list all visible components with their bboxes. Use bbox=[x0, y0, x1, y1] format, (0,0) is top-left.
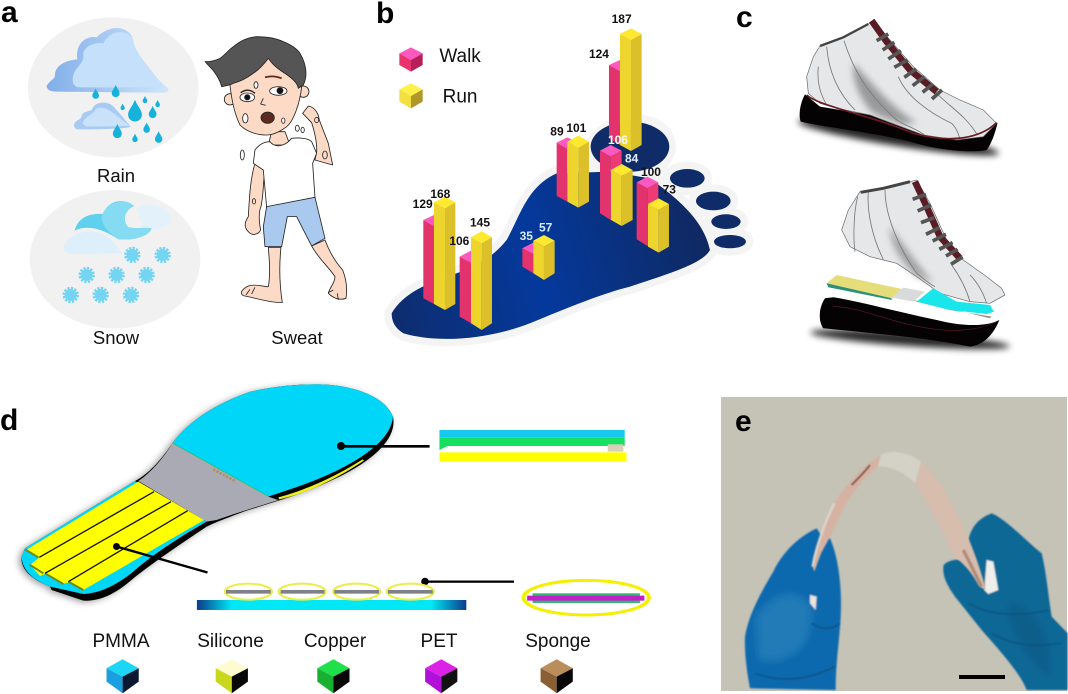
legend: Run: Run bbox=[443, 87, 477, 108]
value labels: 124 bbox=[589, 47, 609, 61]
value labels: 89 bbox=[550, 125, 564, 139]
legend: PET: PET bbox=[421, 631, 458, 652]
illustration: sweating boy bbox=[205, 37, 347, 303]
legend: Run bbox=[399, 83, 477, 108]
bars: forefoot right bbox=[637, 177, 669, 253]
foot with toes bbox=[392, 122, 746, 339]
panel e: photo of bending insole bbox=[721, 397, 1068, 691]
callout line: forefoot section bbox=[113, 543, 514, 585]
value labels: 145 bbox=[470, 216, 490, 230]
legend: Sponge: Sponge bbox=[525, 631, 591, 652]
legend: Silicone bbox=[197, 631, 264, 693]
panel b: foot pressure bar chart bbox=[392, 12, 746, 339]
panel label c: c bbox=[736, 1, 753, 34]
label: Rain: Rain bbox=[97, 165, 135, 186]
legend: Walk: Walk bbox=[439, 46, 481, 67]
cross-section: forefoot bbox=[197, 584, 466, 610]
legend: Silicone: Silicone bbox=[197, 631, 264, 652]
value labels: 35 bbox=[520, 229, 533, 243]
icon: rain bbox=[28, 17, 199, 157]
callout line: heel section bbox=[337, 442, 430, 450]
label: Snow: Snow bbox=[93, 327, 140, 348]
value labels: 84 bbox=[625, 151, 639, 165]
value labels: 106 bbox=[608, 133, 628, 147]
value labels: 129 bbox=[413, 197, 433, 211]
value labels: 101 bbox=[566, 121, 587, 135]
bars: forefoot middle bbox=[600, 145, 633, 226]
shoe exploded bbox=[810, 180, 1010, 353]
shoe assembled bbox=[797, 20, 1000, 162]
panel label e: e bbox=[735, 405, 752, 438]
bars: heel bbox=[423, 197, 492, 330]
value labels: 73 bbox=[663, 183, 676, 197]
legend: PMMA bbox=[92, 631, 150, 693]
bars: big toe bbox=[609, 28, 642, 151]
legend: Walk bbox=[399, 46, 481, 72]
panel d: insole structure bbox=[19, 384, 649, 693]
value labels: 187 bbox=[612, 12, 632, 26]
scale bar bbox=[959, 675, 1005, 679]
value labels: 100 bbox=[641, 165, 661, 179]
value labels bbox=[413, 12, 676, 248]
bent insole bbox=[813, 452, 986, 590]
value labels: 168 bbox=[430, 187, 451, 201]
legend: PMMA: PMMA bbox=[92, 631, 150, 652]
value labels: 106 bbox=[449, 234, 470, 248]
legend: Sponge bbox=[525, 631, 591, 693]
cross-section: heel bbox=[439, 430, 626, 462]
icon: snow bbox=[30, 190, 200, 329]
legend: PET bbox=[421, 631, 458, 693]
cross-section: electrode detail bbox=[524, 580, 649, 615]
bars: arch bbox=[522, 235, 555, 280]
panel label d: d bbox=[0, 404, 18, 437]
value labels: 57 bbox=[539, 220, 553, 234]
bars: forefoot left bbox=[557, 136, 589, 208]
panel c: shoe and exploded view bbox=[797, 20, 1010, 353]
legend: Copper bbox=[304, 631, 367, 693]
right glove bbox=[943, 513, 1068, 690]
panel a: weather and sweat bbox=[28, 17, 347, 348]
photo background bbox=[721, 397, 1067, 691]
legend: Copper: Copper bbox=[304, 631, 367, 652]
left glove bbox=[745, 528, 841, 690]
insole bbox=[19, 384, 394, 602]
label: Sweat: Sweat bbox=[271, 327, 323, 348]
